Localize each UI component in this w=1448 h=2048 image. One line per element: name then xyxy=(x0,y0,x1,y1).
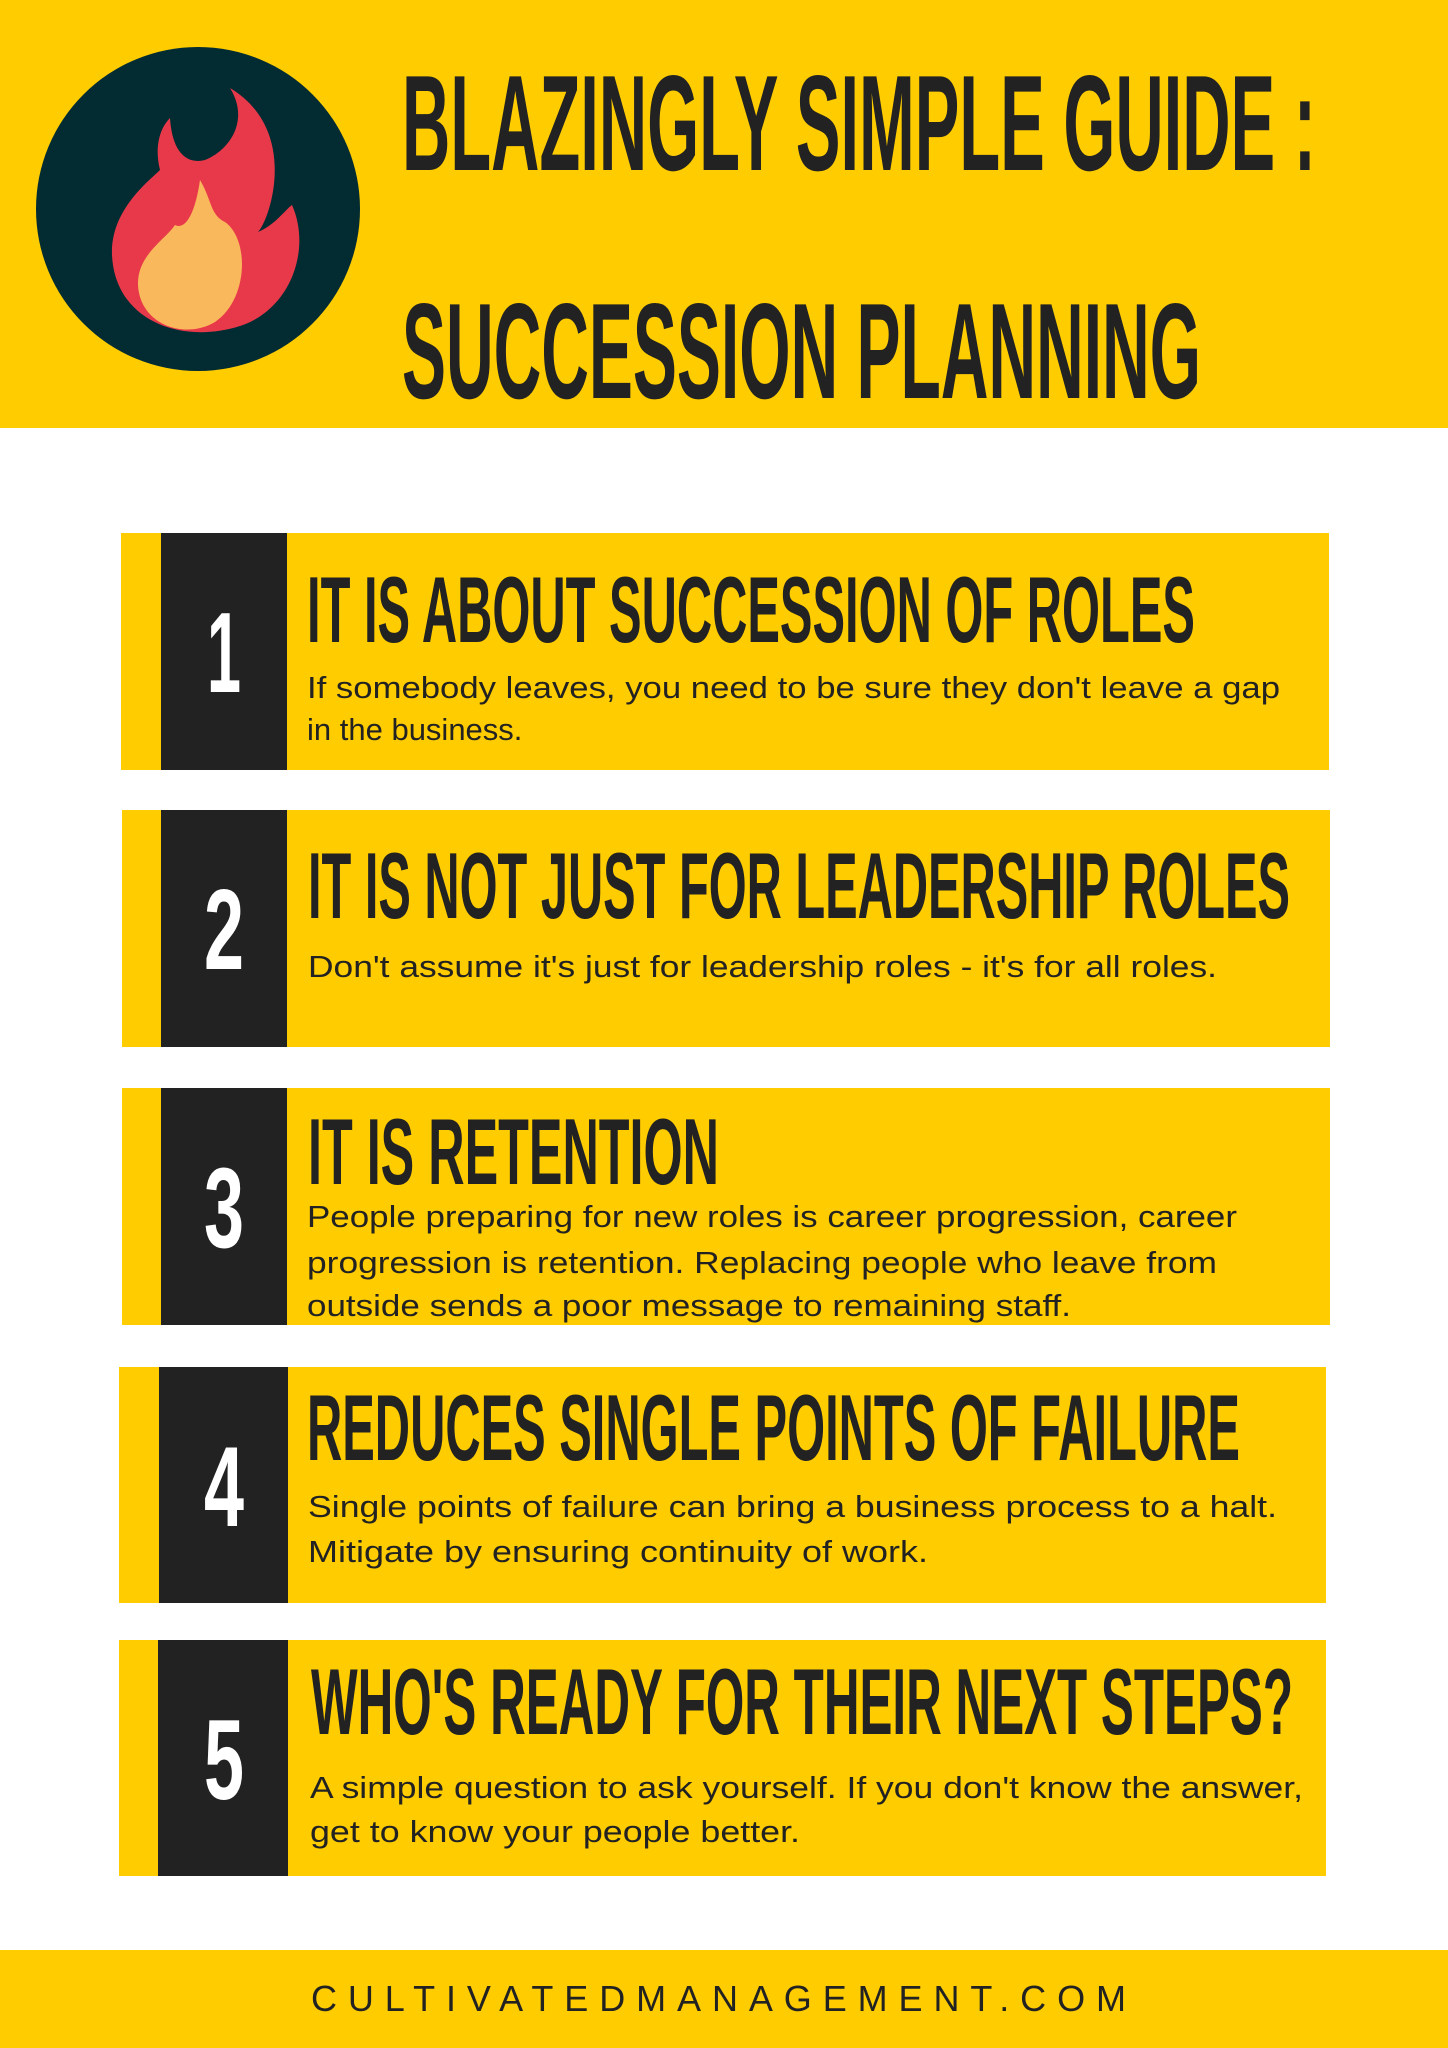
panel: 5: A simple question to ask yourself. If you don't know the answer, xyxy=(310,1770,1303,1805)
header band xyxy=(0,0,1448,428)
panel: 4: Single points of failure can bring a business process to a halt. xyxy=(308,1489,1277,1524)
panel: 5: 5 xyxy=(204,1697,244,1824)
panel: 4: 4 xyxy=(204,1424,244,1551)
panel: 2: Don't assume it's just for leadership roles - it's for all roles. xyxy=(308,949,1217,984)
panel: 1: If somebody leaves, you need to be sure they don't leave a gap xyxy=(307,670,1280,705)
panel: 3: 3 xyxy=(204,1145,244,1272)
icon: flame in circle xyxy=(36,47,360,371)
panel: 2 xyxy=(122,810,1330,1047)
footer: CULTIVATEDMANAGEMENT.COM xyxy=(311,1978,1126,2019)
panel: 5: get to know your people better. xyxy=(310,1814,800,1849)
panel: 1: 1 xyxy=(207,590,241,717)
panel: 3: progression is retention. Replacing people who leave from xyxy=(307,1245,1217,1280)
panel: 3: People preparing for new roles is career progression, career xyxy=(307,1199,1237,1234)
panel: 3 xyxy=(122,1088,1330,1325)
title xyxy=(402,47,1316,427)
panel: 3: IT IS RETENTION xyxy=(308,1099,719,1204)
panel: 4: Mitigate by ensuring continuity of work. xyxy=(308,1534,928,1569)
panel: 2: 2 xyxy=(204,867,244,994)
panel: 4 xyxy=(119,1367,1326,1603)
panel: 1: in the business. xyxy=(307,712,522,747)
footer xyxy=(0,1950,1448,2048)
panel: 3: outside sends a poor message to remaining staff. xyxy=(307,1288,1071,1323)
panel: 5 xyxy=(119,1640,1326,1876)
panel: 1 xyxy=(121,533,1329,770)
